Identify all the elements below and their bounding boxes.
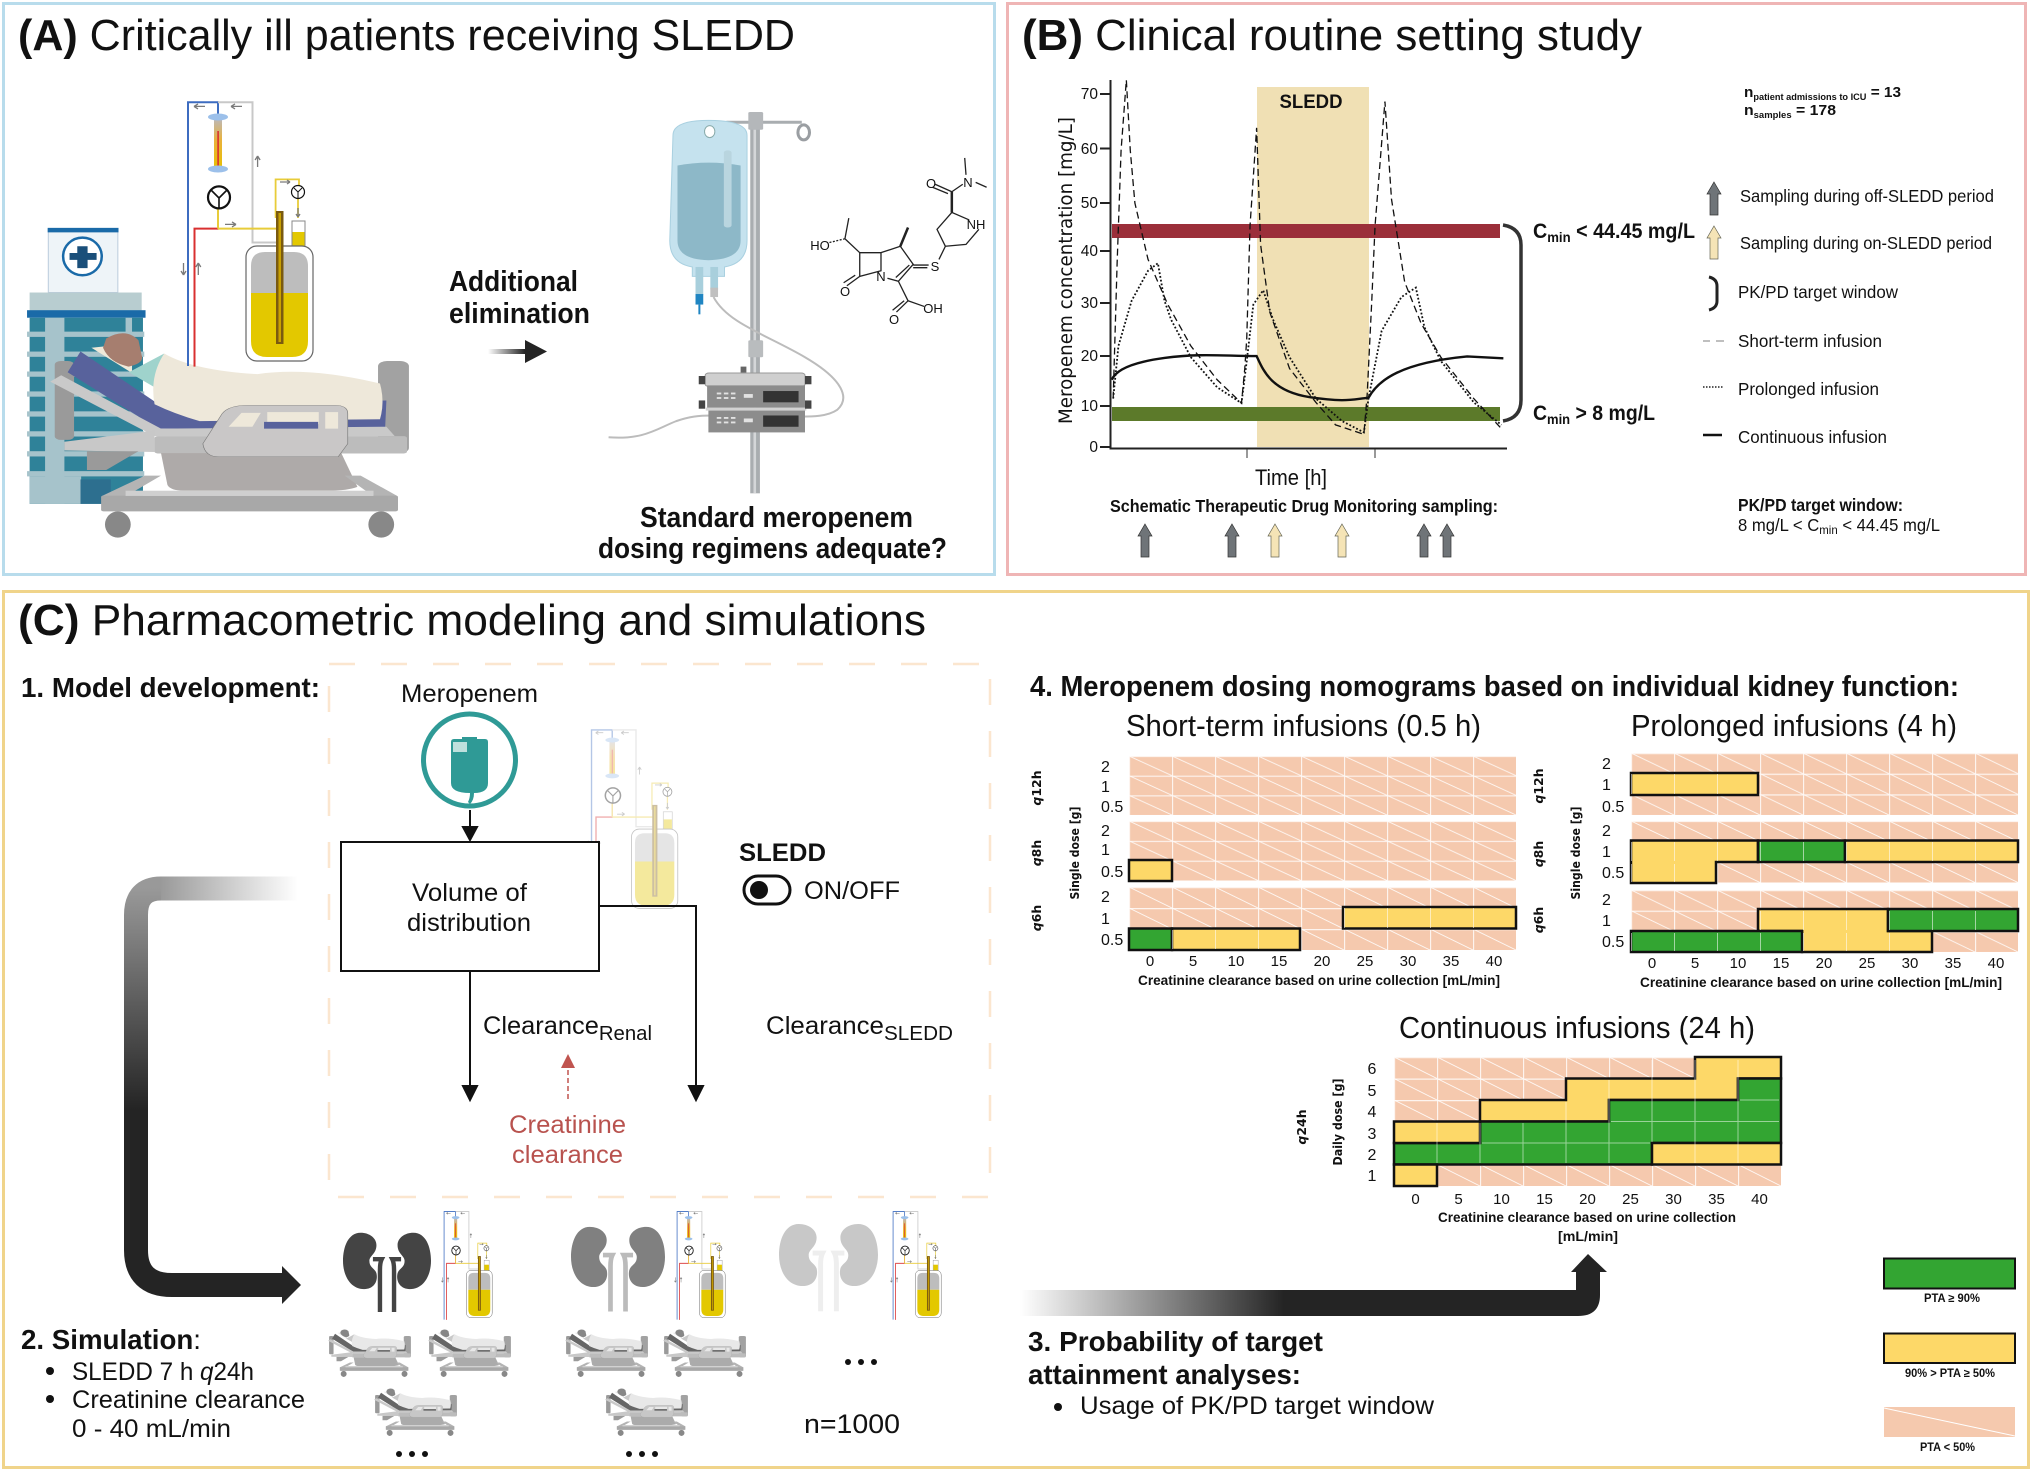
legend: Short-term infusion <box>1738 331 1882 351</box>
sample counts: n <box>1744 102 1753 119</box>
toggle: SLEDD on/off <box>739 839 900 905</box>
label: upper limit: C <box>1533 220 1548 243</box>
nomogram: continuous infusions: q24h <box>1294 1109 1309 1145</box>
nomogram: prolonged infusions <box>1531 708 2018 990</box>
title B: (B) Clinical routine setting study <box>1022 11 1642 60</box>
SLEDD label: SLEDD <box>1280 92 1342 113</box>
y tick labels: 10 <box>1081 398 1098 415</box>
text: target window definition: < 44.45 mg/L <box>1838 515 1940 535</box>
concentration-time chart <box>1055 80 1695 490</box>
nomogram: prolonged infusions: 30 <box>1902 955 1918 972</box>
arrow: to infusion <box>488 340 547 363</box>
legend: PK/PD target window <box>1738 282 1898 302</box>
legend: PTA <box>1884 1258 2015 1454</box>
nomogram: short-term infusions: 0 <box>1146 953 1154 970</box>
nomogram: short-term infusions: 2 <box>1101 889 1110 906</box>
nomogram: prolonged infusions: 2 <box>1602 892 1611 909</box>
icon: meropenem bag <box>424 714 516 806</box>
text: simulation <box>21 1324 305 1443</box>
label: upper limit: < 44.45 mg/L <box>1571 220 1695 243</box>
nomogram: continuous infusions: 35 <box>1708 1191 1725 1208</box>
nomogram: continuous infusions: 3 <box>1368 1126 1377 1143</box>
icon: hospital building <box>27 228 146 504</box>
nomogram: short-term infusions: 20 <box>1314 953 1330 970</box>
nomogram: prolonged infusions: 2 <box>1602 823 1611 840</box>
legend: PTA: 90% > PTA ≥ 50% <box>1905 1368 1995 1380</box>
sampling schedule <box>1110 496 1498 557</box>
nomogram: short-term infusions: 1 <box>1101 779 1110 796</box>
nomogram: continuous infusions: 30 <box>1665 1191 1682 1208</box>
nomogram: short-term infusions: 25 <box>1357 953 1373 970</box>
nomogram: short-term infusions: 0.5 <box>1101 799 1123 816</box>
arrow: PTA to nomograms <box>1020 1254 1607 1316</box>
label: renal clearance: Renal <box>599 1023 652 1045</box>
text: probability of target attainment: Usage of PK/PD target window <box>1080 1392 1435 1420</box>
nomogram: continuous infusions: 1 <box>1368 1168 1377 1185</box>
y tick labels: 20 <box>1081 348 1098 365</box>
y tick labels: 0 <box>1089 439 1098 456</box>
text: simulation: 0 - 40 mL/min <box>72 1415 231 1443</box>
panel A: critically ill patients <box>4 4 994 574</box>
nomogram: short-term infusions: 10 <box>1228 953 1244 970</box>
nomogram: short-term infusions: 0.5 <box>1101 932 1123 949</box>
nomogram: short-term infusions: 2 <box>1101 823 1110 840</box>
nomogram: short-term infusions: 1 <box>1101 842 1110 859</box>
sampling schedule: Schematic Therapeutic Drug Monitoring sampling: <box>1110 496 1498 516</box>
axis ticks <box>1247 449 1375 458</box>
nomogram: prolonged infusions: 20 <box>1816 955 1832 972</box>
illustration: patient in hospital bed <box>50 333 409 538</box>
nomogram: prolonged infusions: q6h <box>1531 907 1546 933</box>
nomogram: continuous infusions <box>1294 1010 1781 1244</box>
nomogram: continuous infusions: Creatinine clearance based on urine collection <box>1438 1209 1736 1225</box>
nomogram: short-term infusions: q12h <box>1029 770 1044 806</box>
nomogram: prolonged infusions: q12h <box>1531 768 1546 804</box>
arrow: creatinine clearance effect <box>561 1054 575 1099</box>
text: probability of target attainment <box>1028 1326 1435 1420</box>
text: target window definition: 8 mg/L < C <box>1738 515 1823 535</box>
sample counts: patient admissions to ICU <box>1753 92 1866 102</box>
legend: Continuous infusion <box>1738 427 1887 447</box>
simulation group 1 <box>328 1212 511 1457</box>
nomogram: prolonged infusions: 15 <box>1773 955 1789 972</box>
nomogram: continuous infusions: 2 <box>1368 1147 1377 1164</box>
y axis label: Meropenem concentration [mg/L] <box>1055 117 1077 424</box>
chemical structure: meropenem: N <box>876 269 886 284</box>
text: simulation: SLEDD 7 h q24h <box>72 1358 254 1386</box>
panel C: pharmacometric modeling and simulations <box>4 592 2028 1468</box>
simulation group 3 <box>779 1212 941 1439</box>
text: standard dosing question: Standard meropenem <box>640 502 913 534</box>
nomogram: prolonged infusions: 0 <box>1648 955 1656 972</box>
nomogram: continuous infusions: 25 <box>1622 1191 1639 1208</box>
chemical structure: meropenem: NH <box>967 217 985 232</box>
box: volume of distribution <box>341 842 599 971</box>
nomogram: short-term infusions: q8h <box>1029 840 1044 866</box>
nomogram: continuous infusions: Continuous infusions (24 h) <box>1399 1010 1755 1045</box>
nomogram: short-term infusions: 1 <box>1101 911 1110 928</box>
title A: (A) Critically ill patients receiving SLEDD <box>18 11 795 60</box>
text: additional elimination <box>449 266 590 330</box>
nomogram: short-term infusions: Short-term infusions (0.5 h) <box>1126 708 1481 743</box>
label: creatinine clearance <box>509 1111 626 1169</box>
chemical structure: meropenem: O <box>840 284 850 299</box>
bracket: PK/PD target window <box>1503 225 1521 421</box>
text: standard dosing question <box>598 502 947 565</box>
nomogram: continuous infusions: 10 <box>1493 1191 1510 1208</box>
nomogram: prolonged infusions: 5 <box>1691 955 1699 972</box>
nomogram: prolonged infusions: 2 <box>1602 756 1611 773</box>
label: meropenem: Meropenem <box>401 680 538 708</box>
box: volume of distribution: Volume of <box>412 879 527 907</box>
label: creatinine clearance: Creatinine <box>509 1111 626 1139</box>
nomogram: continuous infusions: 40 <box>1751 1191 1768 1208</box>
text: probability of target attainment: attainment analyses: <box>1028 1359 1301 1390</box>
nomogram: continuous infusions: Daily dose [g] <box>1330 1078 1345 1166</box>
text: target window definition <box>1738 495 1940 537</box>
nomogram: continuous infusions: 4 <box>1368 1104 1377 1121</box>
nomogram: short-term infusions: q6h <box>1029 905 1044 931</box>
simulation group 3: n=1000 <box>804 1409 900 1439</box>
nomogram: short-term infusions <box>1029 708 1516 988</box>
label: creatinine clearance: clearance <box>512 1141 623 1169</box>
nomogram: short-term infusions: 30 <box>1400 953 1416 970</box>
nomogram: prolonged infusions: 1 <box>1602 913 1611 930</box>
box: volume of distribution: distribution <box>407 909 531 937</box>
chemical structure: meropenem: HO <box>810 238 830 253</box>
legend: PTA: PTA ≥ 90% <box>1924 1293 1980 1305</box>
faded SLEDD machine <box>587 730 678 912</box>
sample counts: = 178 <box>1792 102 1836 119</box>
illustration: IV bag, pole and infusion pumps <box>609 112 843 493</box>
nomogram: prolonged infusions: 0.5 <box>1602 934 1624 951</box>
text: simulation: Creatinine clearance <box>72 1386 305 1414</box>
text: target window definition: min <box>1819 523 1838 537</box>
nomogram: prolonged infusions: 1 <box>1602 844 1611 861</box>
nomogram: prolonged infusions: Single dose [g] <box>1568 806 1583 900</box>
legend: Sampling during on-SLEDD period <box>1740 233 1992 253</box>
arrow: dose input <box>463 810 477 840</box>
label: lower limit: > 8 mg/L <box>1570 402 1655 425</box>
nomogram: continuous infusions: 5 <box>1454 1191 1463 1208</box>
text: additional elimination: Additional <box>449 266 578 298</box>
toggle: SLEDD on/off: ON/OFF <box>804 877 900 905</box>
label: lower limit: min <box>1547 411 1570 427</box>
curves <box>1112 80 1503 434</box>
arrow: renal clearance <box>463 971 477 1100</box>
y tick labels: 40 <box>1081 243 1098 260</box>
nomogram: short-term infusions: 15 <box>1271 953 1287 970</box>
chemical structure: meropenem: O <box>926 176 936 191</box>
sample counts: = 13 <box>1866 84 1901 101</box>
nomogram: prolonged infusions: 35 <box>1945 955 1961 972</box>
y tick labels: 70 <box>1081 86 1098 103</box>
nomogram: prolonged infusions: Prolonged infusions (4 h) <box>1631 708 1957 743</box>
nomogram: prolonged infusions: 0.5 <box>1602 865 1624 882</box>
nomogram: short-term infusions: 5 <box>1189 953 1197 970</box>
panel B: clinical routine setting study <box>1008 4 2026 574</box>
y tick labels <box>1081 86 1098 456</box>
y tick labels: 30 <box>1081 295 1098 312</box>
text: probability of target attainment: 3. Probability of target <box>1028 1326 1323 1357</box>
nomogram: continuous infusions: 15 <box>1536 1191 1553 1208</box>
nomogram: short-term infusions: 0.5 <box>1101 864 1123 881</box>
nomogram: prolonged infusions: Creatinine clearance based on urine collection [mL/min] <box>1640 974 2002 990</box>
arrow: SLEDD clearance <box>599 906 703 1100</box>
legend: PTA: PTA < 50% <box>1920 1442 1975 1454</box>
text: standard dosing question: dosing regimens adequate? <box>598 533 947 565</box>
heading: model development: 1. Model development: <box>21 672 320 703</box>
nomogram: prolonged infusions: 1 <box>1602 777 1611 794</box>
nomogram: prolonged infusions: 25 <box>1859 955 1875 972</box>
illustration: SLEDD dialysis machine <box>181 102 313 367</box>
nomogram: short-term infusions: Single dose [g] <box>1067 806 1082 900</box>
model diagram <box>329 664 990 1197</box>
sample counts: n <box>1744 84 1753 101</box>
toggle: SLEDD on/off: SLEDD <box>739 839 826 867</box>
nomogram: continuous infusions: [mL/min] <box>1558 1228 1618 1244</box>
upper target band <box>1112 224 1500 238</box>
nomogram: continuous infusions: 20 <box>1579 1191 1596 1208</box>
label: SLEDD clearance: SLEDD <box>884 1023 953 1045</box>
nomogram: prolonged infusions: q8h <box>1531 841 1546 867</box>
chemical structure: meropenem: S <box>931 259 940 274</box>
legend: Prolonged infusion <box>1738 379 1879 399</box>
title C: (C) Pharmacometric modeling and simulations <box>18 596 926 645</box>
chemical structure: meropenem: N <box>963 175 973 190</box>
chemical structure: meropenem: O <box>889 312 899 327</box>
nomogram: short-term infusions: 35 <box>1443 953 1459 970</box>
nomogram: continuous infusions: 5 <box>1368 1083 1377 1100</box>
label: SLEDD clearance: Clearance <box>766 1012 880 1040</box>
axes <box>1100 80 1507 448</box>
legend: Sampling during off-SLEDD period <box>1740 186 1994 206</box>
nomogram: short-term infusions: 2 <box>1101 759 1110 776</box>
y tick labels: 60 <box>1081 141 1098 158</box>
sample counts <box>1744 84 1901 120</box>
y tick labels: 50 <box>1081 195 1098 212</box>
chemical structure: meropenem: OH <box>923 301 943 316</box>
nomogram: prolonged infusions: 0.5 <box>1602 799 1624 816</box>
heading: dosing nomograms: 4. Meropenem dosing nomograms based on individual kidney function: <box>1030 671 1959 703</box>
chemical structure: meropenem <box>810 158 987 327</box>
sample counts: samples <box>1754 110 1792 120</box>
text: simulation: 2. Simulation: <box>21 1324 201 1355</box>
label: lower limit: C <box>1533 402 1548 425</box>
text: additional elimination: elimination <box>449 298 590 330</box>
legend <box>1703 182 1994 447</box>
nomogram: continuous infusions: 0 <box>1411 1191 1420 1208</box>
nomogram: prolonged infusions: 10 <box>1730 955 1746 972</box>
text: target window definition: PK/PD target window: <box>1738 495 1903 515</box>
nomogram: short-term infusions: 40 <box>1486 953 1502 970</box>
SLEDD period band <box>1257 87 1369 447</box>
label: upper limit: min <box>1547 229 1571 245</box>
nomogram: prolonged infusions: 40 <box>1988 955 2004 972</box>
simulation group 2 <box>565 1212 746 1457</box>
x axis label: Time [h] <box>1255 465 1327 490</box>
arrow: model to simulation <box>136 888 301 1304</box>
nomogram: continuous infusions: 6 <box>1368 1061 1377 1078</box>
label: renal clearance: Clearance <box>483 1012 597 1040</box>
lower target band <box>1112 407 1500 421</box>
nomogram: short-term infusions: Creatinine clearance based on urine collection [mL/min] <box>1138 972 1500 988</box>
